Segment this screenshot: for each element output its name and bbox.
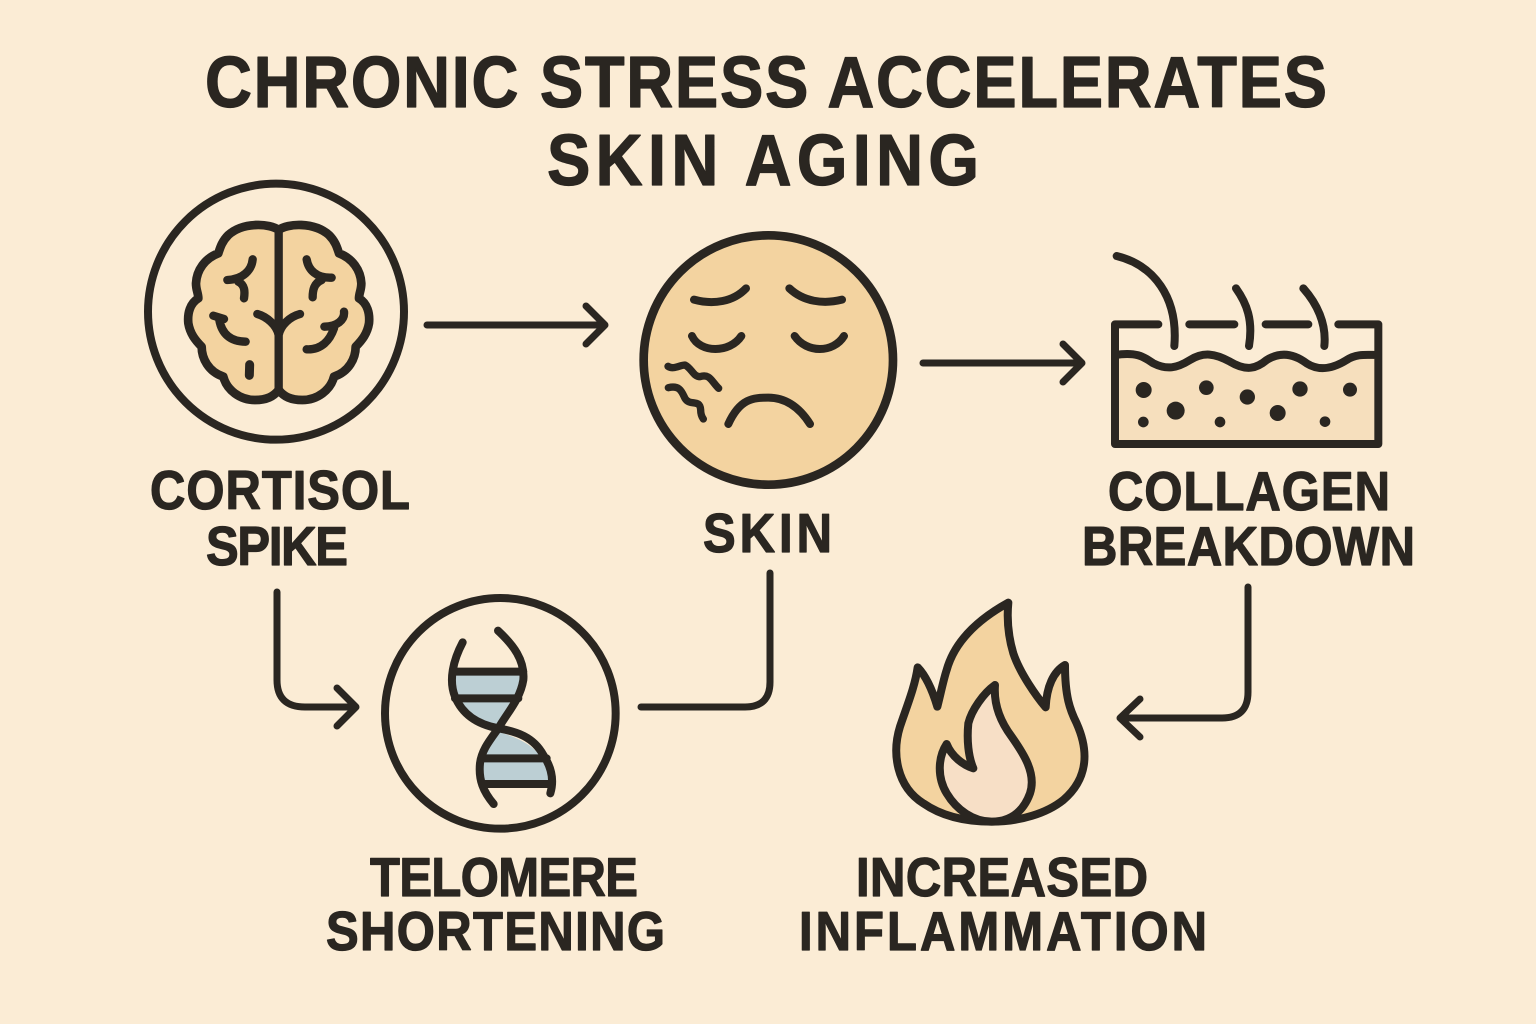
label: increased inflammation: INFLAMMATION [799,901,1207,963]
icon: stressed skin face [644,235,893,485]
label: cortisol spike [150,460,410,578]
icon: dna in circle [385,598,616,829]
label: increased inflammation [799,847,1207,963]
arrow: telomere to skin [641,573,770,707]
title [205,42,1327,201]
label: cortisol spike: CORTISOL [150,460,410,522]
icon: collagen skin layers [1115,256,1378,444]
label: collagen breakdown: COLLAGEN [1108,461,1390,523]
label: telomere shortening: TELOMERE [370,847,638,909]
label: collagen breakdown: BREAKDOWN [1082,516,1415,578]
label: telomere shortening [326,847,665,963]
label: skin: SKIN [703,503,832,565]
label: collagen breakdown [1082,461,1415,578]
arrow: skin to collagen [923,344,1082,382]
title: CHRONIC STRESS ACCELERATES [205,42,1327,123]
icon: brain in circle [148,184,404,440]
label: telomere shortening: SHORTENING [326,901,665,963]
title: SKIN AGING [547,120,979,201]
label: cortisol spike: SPIKE [206,516,348,578]
arrow: collagen to inflammation [1120,587,1248,737]
label: increased inflammation: INCREASED [856,847,1148,909]
arrow: cortisol to telomere [277,592,356,726]
arrow: cortisol to skin [427,306,605,344]
icon: flame [896,603,1084,822]
